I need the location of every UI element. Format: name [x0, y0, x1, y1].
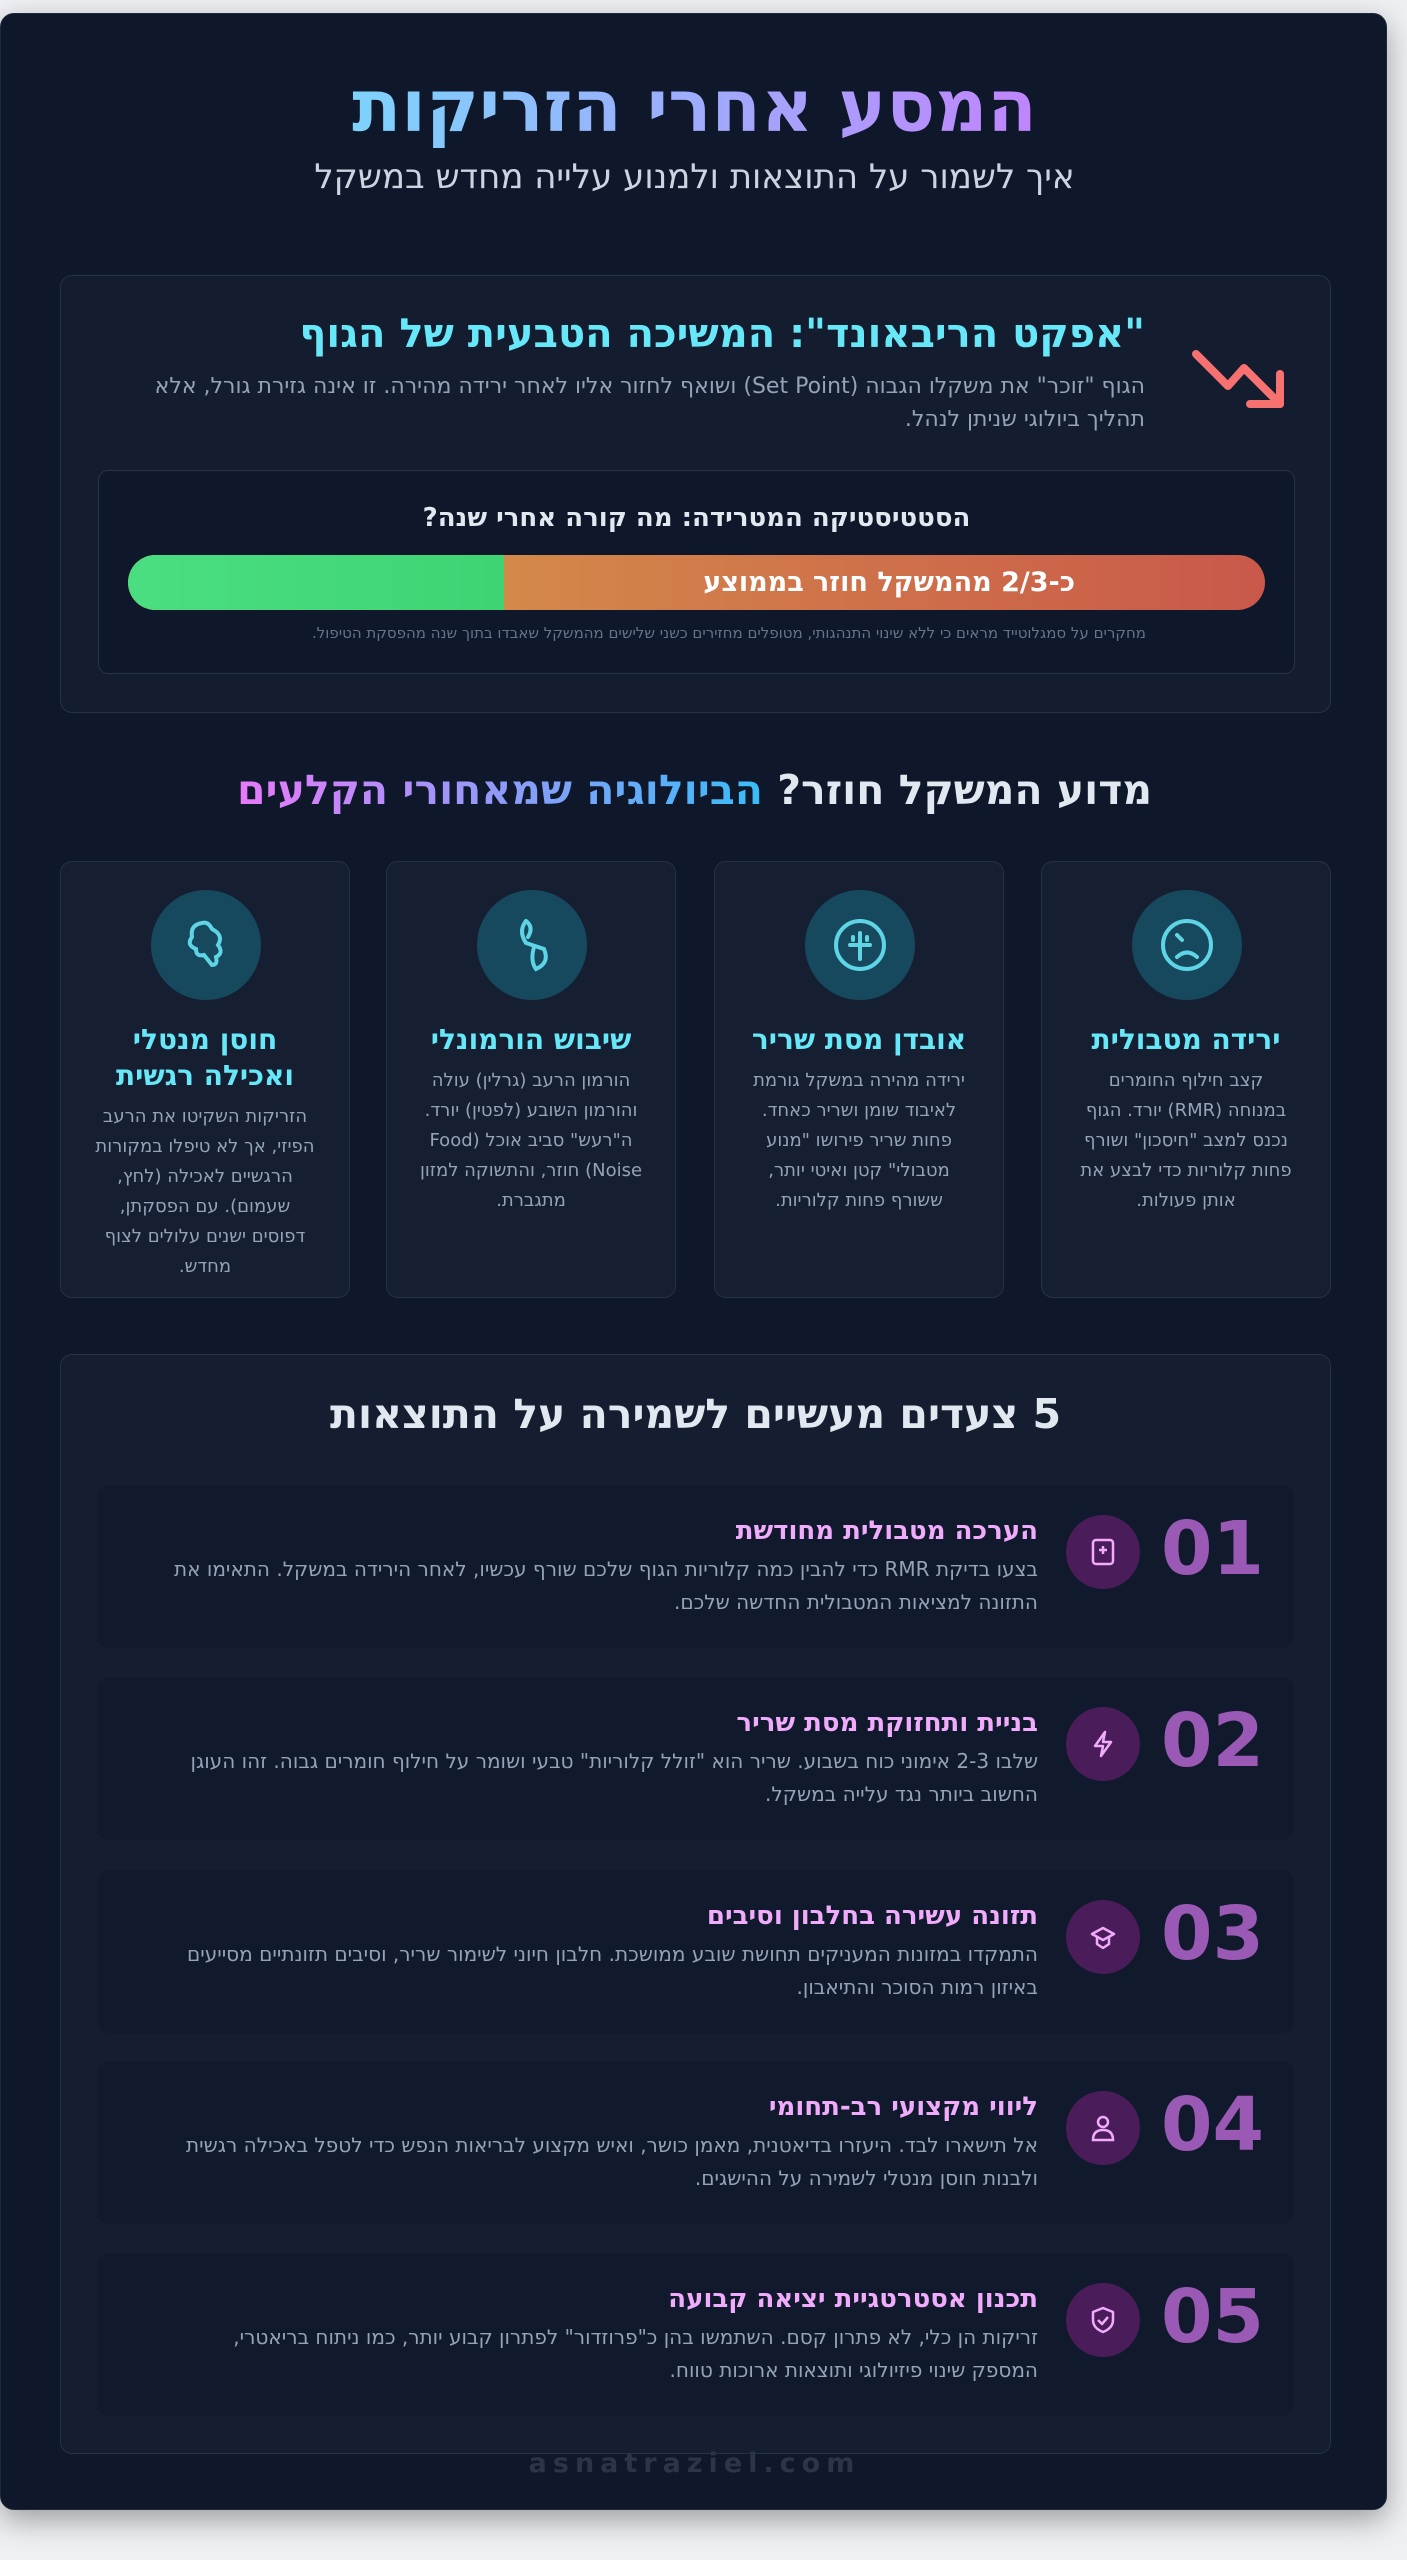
icon: people	[1066, 2091, 1140, 2165]
card: metabolic drop: קצב חילוף החומרים במנוחה (RMR) יורד. הגוף נכנס למצב "חיסכון" ושורף פחות קלוריות כדי לבצע את אותן פעולות.	[1080, 1070, 1292, 1211]
step 04: ליווי מקצועי רב-תחומי	[769, 2092, 1038, 2122]
card: hormonal disruption: הורמון הרעב (גרלין) עולה והורמון השובע (לפטין) יורד. ה"רעש" סביב אוכל (Food Noise) חוזר, והתשוקה למזון מתגברת.	[420, 1070, 642, 1211]
card: metabolic drop	[1041, 861, 1331, 1298]
section heading: biology: מדוע המשקל חוזר? הביולוגיה שמאחורי הקלעים	[237, 766, 1152, 814]
footer: website: asnatraziel.com	[529, 2448, 860, 2479]
step 05: זריקות הן כלי, לא פתרון קסם. השתמשו בהן כ"פרוזדור" לפתרון קבוע יותר, כמו ניתוח בריאטרי, המספק שינוי פיזיולוגי ותוצאות ארוכות טווח.	[233, 2325, 1038, 2382]
heading: "אפקט הריבאונד": המשיכה הטבעית של הגוף	[299, 311, 1145, 357]
step 03: התמקדו במזונות המעניקים תחושת שובע ממושכת. חלבון חיוני לשימור שריר, וסיבים תזונתיים מסייעים באיזון רמות הסוכר והתיאבון.	[187, 1942, 1038, 1999]
step 03: תזונה עשירה בחלבון וסיבים	[707, 1901, 1038, 1931]
icon: lightning	[1066, 1707, 1140, 1781]
card: muscle loss	[714, 861, 1004, 1298]
bar chart: כ-2/3 מהמשקל חוזר בממוצע	[703, 567, 1075, 598]
icon: nutrition	[1066, 1900, 1140, 1974]
subtitle: איך לשמור על התוצאות ולמנוע עלייה מחדש במשקל	[314, 157, 1075, 197]
card: muscle loss: אובדן מסת שריר	[752, 1023, 966, 1056]
inner box: statistic	[98, 470, 1295, 674]
icon: shield	[1066, 2283, 1140, 2357]
icon: trending down arrow	[1192, 350, 1284, 408]
step 01: בצעו בדיקת RMR כדי להבין כמה קלוריות הגוף שלכם שורף עכשיו, לאחר הירידה במשקל. התאימו את התזונה למציאות המטבולית החדשה שלכם.	[174, 1557, 1038, 1614]
card: hormonal disruption	[386, 861, 676, 1298]
step 02: 02	[1161, 1698, 1264, 1784]
footnote: מחקרים על סמגלוטייד מראים כי ללא שינוי התנהגותי, מטופלים מחזירים כשני שלישים מהמשקל שאבדו בתוך שנה מהפסקת הטיפול.	[312, 624, 1146, 642]
icon: hormone loop	[477, 890, 587, 1000]
step 03: 03	[1161, 1891, 1264, 1977]
card: mental resilience: חוסן מנטלי	[133, 1023, 277, 1056]
icon: calculator	[1066, 1515, 1140, 1589]
step 04: 04	[1161, 2082, 1264, 2168]
step 01: 01	[1161, 1506, 1264, 1592]
step 05: 05	[1161, 2274, 1264, 2360]
description: הגוף "זוכר" את משקלו הגבוה (Set Point) ושואף לחזור אליו לאחר ירידה מהירה. זו אינה גזירת גורל, אלא תהליך ביולוגי שניתן לנהל.	[155, 374, 1145, 432]
step 03	[97, 1870, 1294, 2033]
step 04: אל תישארו לבד. היעזרו בדיאטנית, מאמן כושר, ואיש מקצוע לבריאות הנפש כדי לטפל באכילה רגשית ולבנות חוסן מנטלי לשמירה על ההישגים.	[186, 2133, 1038, 2190]
icon: brain	[151, 890, 261, 1000]
card: mental resilience	[60, 861, 350, 1298]
icon: circle plus	[805, 890, 915, 1000]
panel: rebound effect	[60, 275, 1331, 713]
step 01	[97, 1485, 1294, 1648]
card: metabolic drop: ירידה מטבולית	[1091, 1023, 1281, 1056]
step 02	[97, 1677, 1294, 1840]
title: המסע אחרי הזריקות	[352, 64, 1037, 148]
step 02: בניית ותחזוקת מסת שריר	[736, 1708, 1038, 1738]
panel: 5 steps	[60, 1354, 1331, 2454]
card: mental resilience: הזריקות השקיטו את הרעב הפיזי, אך לא טיפלו במקורות הרגשיים לאכילה (לחץ, שעמום). עם הפסקתן, דפוסים ישנים עלולים לצוף מחדש.	[95, 1106, 315, 1277]
steps heading: 5 צעדים מעשיים לשמירה על התוצאות	[330, 1390, 1061, 1438]
card: mental resilience: ואכילה רגשית	[116, 1059, 294, 1092]
icon: sad face	[1132, 890, 1242, 1000]
step 01: הערכה מטבולית מחודשת	[736, 1516, 1038, 1546]
card: muscle loss: ירידה מהירה במשקל גורמת לאיבוד שומן ושריר כאחד. פחות שריר פירושו "מנוע מטבולי" קטן ואיטי יותר, ששורף פחות קלוריות.	[753, 1070, 965, 1211]
statistic heading: הסטטיסטיקה המטרידה: מה קורה אחרי שנה?	[423, 503, 970, 533]
step 05: תכנון אסטרטגיית יציאה קבועה	[668, 2284, 1038, 2314]
card: hormonal disruption: שיבוש הורמונלי	[431, 1023, 631, 1056]
step 05	[97, 2253, 1294, 2416]
step 04	[97, 2061, 1294, 2224]
bar chart	[128, 555, 1265, 610]
step 02: שלבו 2-3 אימוני כוח בשבוע. שריר הוא "זולל קלוריות" טבעי ושומר על חילוף חומרים גבוה. זהו העוגן החשוב ביותר נגד עלייה במשקל.	[191, 1749, 1038, 1806]
